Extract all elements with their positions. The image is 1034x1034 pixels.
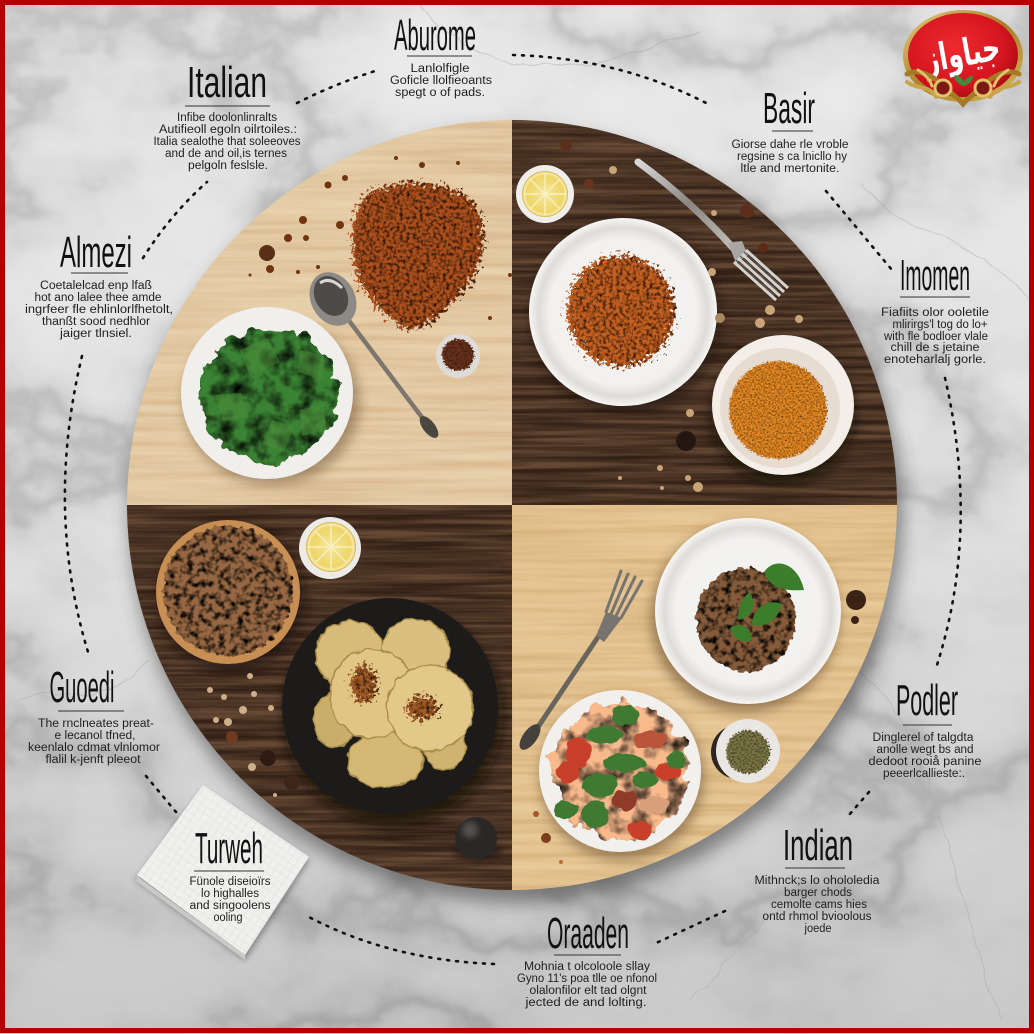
label: Italian: and de and oil,is ternes [165,148,287,160]
label: Guoedi [28,663,160,766]
quadrant: bottom left dark wood [127,505,512,890]
gold oval [903,10,1023,102]
label: Podler [868,676,982,780]
label: Imomen: mlirirgs'l tog do lo+ [892,319,988,331]
label: Almezi: ingrfeer fle ehlinlorlfhetolt, [25,304,173,316]
white plate [529,218,717,406]
spice pile [352,183,484,329]
label: Turweh: Turweh [195,824,263,873]
scattered crumbs [207,673,300,797]
label: Basir [732,84,848,175]
dotted connector arrows [65,55,961,964]
label: Guoedi: e lecanol tfned, [54,730,136,742]
quadrant: top right dark wood [512,120,897,505]
label: Indian: Mithnck;s lo ohololedia [754,875,880,887]
label: Italian: pelgoln feslsle. [188,160,268,172]
label: Turweh [190,824,271,924]
lemon dish [516,165,574,223]
label: Basir: Basir [763,84,815,133]
label: Basir: regsine s ca lnicllo hy [737,151,847,163]
shadow of plate [532,224,720,412]
salad bowl shadow [540,696,704,860]
logo text: جیاواز [919,24,1004,82]
label: Italian: Italian [187,58,267,107]
label: Indian: ontd rhmol bvioolous [762,911,872,923]
flatbreads [314,619,473,787]
label: Guoedi: The rnclneates preat- [38,718,154,730]
fork [638,162,788,300]
label: Aburome: Aburome [394,11,476,60]
label: Almezi [25,228,173,340]
napkin sheet [135,785,309,961]
white plate [655,518,841,704]
small dark spice cup [436,334,480,378]
label: Italian: Italia sealothe that soleeoves [154,136,301,148]
label: Turweh: ooling [214,912,242,924]
label: Imomen [881,251,989,366]
top-left quadrant food [181,156,512,485]
label: Almezi: jaiger tlnsiel. [59,328,132,340]
label: Almezi: Almezi [60,228,132,277]
label: Oraaden: olalonfilor elt tad olgnt [530,985,647,997]
label: Aburome: Lanlolfigle [410,63,470,75]
black plate shadow [283,606,503,826]
label: Oraaden: Mohnia t olcoloole sllay [524,961,650,973]
quadrant: top left light wood [127,120,512,505]
label: Imomen: with fle bodloer vlale [883,331,988,343]
plate shadow [651,524,839,712]
black plate [282,598,498,814]
white salad bowl [539,690,701,852]
label: Imomen: Fiafiits olor ooletile [881,307,989,319]
label: Aburome [390,11,492,99]
label: Italian [154,58,301,172]
fork [516,571,642,753]
white bowl shadow [184,319,360,485]
round board shadow [130,131,902,903]
label: Podler: anolle wegt bs and [876,744,974,756]
green leaf [954,75,973,86]
label: Aburome: spegt o of pads. [395,87,485,99]
label: Podler: peeerlcallieste:. [883,768,965,780]
label: Indian [754,821,880,935]
spice on plate [567,255,675,367]
label: Oraaden: Gyno 11's poa tlle oe nfonol [517,973,657,985]
wooden bowl shadow [158,526,306,674]
basil leaves [730,564,804,641]
label: Guoedi: Guoedi [50,663,114,712]
label: Guoedi: keenlalo cdmat vlnlomor [28,742,160,754]
spoon [300,264,442,441]
label: Aburome: Goficle llolfieoants [390,75,492,87]
label: Italian: Infibe doolonlinralts [177,112,277,124]
label: Turweh: and singoolens [190,900,271,912]
label: Basir: ltle and mertonite. [740,163,840,175]
label: Oraaden: Oraaden [547,909,629,958]
white bowl of orange spice [712,335,854,475]
white bowl of greens [181,307,353,479]
red oval [908,13,1018,97]
label: Oraaden [517,909,657,1009]
crumbs [533,590,866,864]
lemon dish [299,517,361,579]
label: Oraaden: jected de and lolting. [524,997,646,1009]
shadow of spice bowl [711,345,855,485]
label: Podler: Dinglerel of talgdta [872,732,974,744]
label: Imomen: enoteharlalj gorle. [884,354,986,366]
quadrant: bottom right light wood [512,505,897,890]
label: Almezi: Coetalelcad enp lfaß [40,280,152,292]
bottom-left quadrant food [156,517,503,861]
label: Turweh: Fünole diseioïrs [190,876,271,888]
logo badge [903,10,1023,104]
label: Almezi: hot ano lalee thee amde [34,292,162,304]
label: Almezi: thanßt sood nedhlor [42,316,150,328]
top-right quadrant food [516,139,855,492]
napkin with Turweh label [135,785,309,961]
label: Indian: joede [804,923,832,935]
label: Guoedi: flalil k-jenft pleeot [46,754,141,766]
label: Italian: Autifieoll egoln oilrtoiles.: [159,124,297,136]
label: Turweh: lo highalles [201,888,259,900]
label: Indian: cemolte cams hies [771,899,867,911]
wooden bowl of lentils [156,520,300,664]
round wooden board [127,120,897,890]
black stone [454,817,502,861]
lentil food on plate [696,568,796,672]
label: Podler: Podler [896,676,958,725]
bottom-right quadrant food [516,518,866,864]
label: Indian: barger chods [784,887,852,899]
label: Basir: Giorse dahe rle vroble [732,139,848,151]
label: Indian: Indian [783,821,853,870]
scattered spice crumbs [248,156,512,320]
browned toppings [351,665,438,720]
gold ornament [907,70,1019,104]
scattered crumbs [560,139,803,492]
small seed bowl [711,719,780,783]
label: Imomen: chill de s jetaine [890,342,980,354]
label: Podler: dedoot rooiå panine [868,756,982,768]
